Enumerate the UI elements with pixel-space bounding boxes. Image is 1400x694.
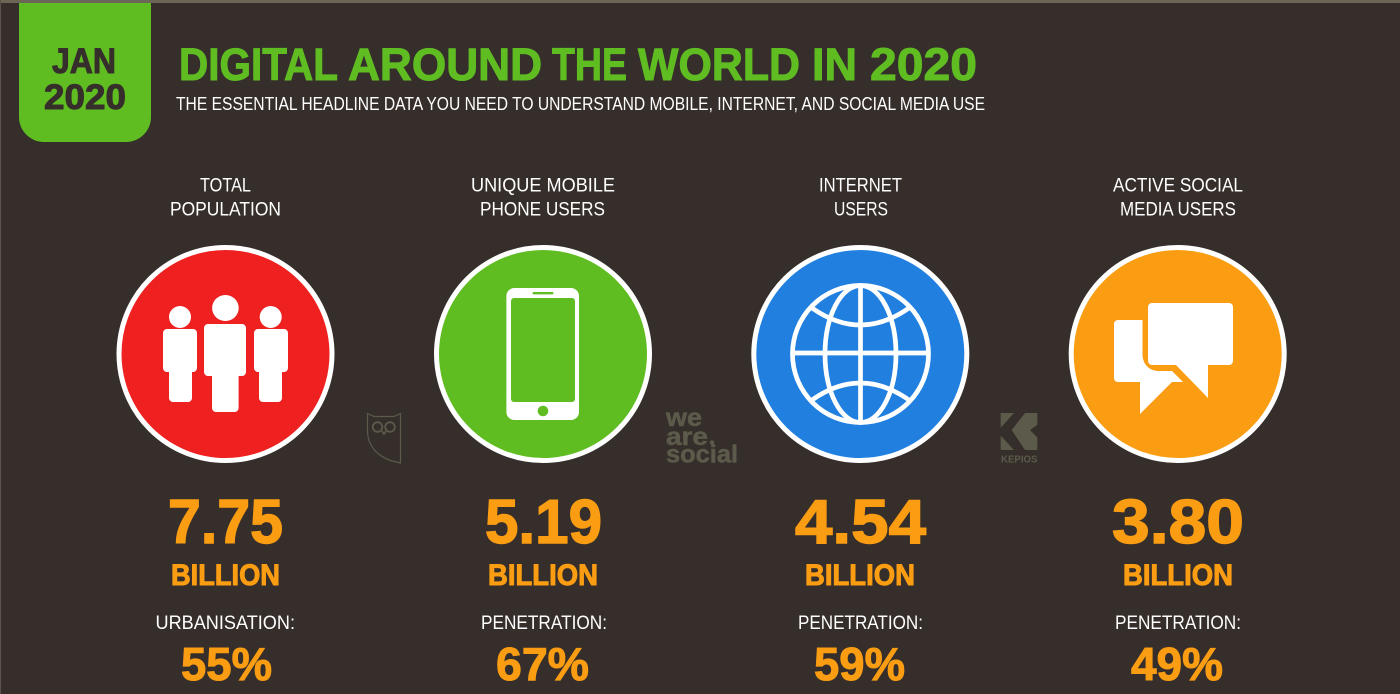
heading: active social media users <box>1113 174 1243 220</box>
panel: internet users <box>754 174 967 690</box>
title: DIGITAL <box>179 39 338 90</box>
logo: we are social: we <box>665 404 702 432</box>
stat: penetration 49%: 49% <box>1131 638 1223 690</box>
stat: penetration 59%: PENETRATION: <box>798 612 923 634</box>
value: 7.75 billion: BILLION <box>171 559 280 592</box>
stat: urbanisation 55%: URBANISATION: <box>156 612 295 634</box>
subtitle: THE ESSENTIAL HEADLINE DATA YOU NEED TO UNDERSTAND MOBILE, INTERNET, AND SOCIAL MEDIA USE <box>176 94 985 114</box>
value: 3.80 billion: BILLION <box>1123 559 1233 592</box>
date tab: 2020 <box>44 78 126 117</box>
icon: chat bubbles in orange circle <box>1071 248 1284 460</box>
stat: penetration 67%: 67% <box>496 638 589 690</box>
date tab: JAN <box>52 42 116 81</box>
value: 4.54 billion: 4.54 <box>795 488 927 557</box>
title <box>179 39 977 90</box>
value: 5.19 billion: 5.19 <box>485 488 602 557</box>
stat: penetration 49%: PENETRATION: <box>1115 612 1241 634</box>
date tab <box>19 3 151 142</box>
value: 7.75 billion: 7.75 <box>168 488 283 557</box>
icon: people in red circle <box>119 248 332 460</box>
value: 3.80 billion: 3.80 <box>1112 488 1244 557</box>
stat: penetration 67%: PENETRATION: <box>481 612 607 634</box>
heading: unique mobile phone users: UNIQUE MOBILE <box>471 174 615 196</box>
value: 5.19 billion: BILLION <box>488 559 598 592</box>
value: 3.80 billion <box>1112 488 1244 592</box>
title: WORLD <box>638 39 800 90</box>
heading: active social media users: MEDIA USERS <box>1120 198 1236 220</box>
logo: we are social: are <box>666 423 708 451</box>
heading: unique mobile phone users <box>471 174 615 220</box>
panel: total population <box>119 174 332 690</box>
icon: phone in green circle <box>436 248 650 460</box>
stat: urbanisation 55%: 55% <box>181 638 272 690</box>
heading: internet users: USERS <box>834 198 888 220</box>
logo: we are social <box>665 404 738 468</box>
logo: we are social: social <box>666 440 738 468</box>
panel: active social media users <box>1071 174 1284 690</box>
value: 7.75 billion <box>168 488 283 592</box>
heading: total population <box>170 174 281 220</box>
title: IN <box>812 39 857 90</box>
stat: urbanisation 55% <box>156 612 295 690</box>
title: THE <box>552 39 627 90</box>
logo: kepios <box>1001 413 1038 466</box>
logo: kepios: KEPIOS <box>1001 454 1038 466</box>
stat: penetration 49% <box>1115 612 1241 690</box>
icon: globe in blue circle <box>754 248 967 460</box>
heading: total population: TOTAL <box>200 174 251 196</box>
heading: unique mobile phone users: PHONE USERS <box>480 198 605 220</box>
stat: penetration 59%: 59% <box>814 638 905 690</box>
stat: penetration 59% <box>798 612 923 690</box>
value: 4.54 billion: BILLION <box>805 559 915 592</box>
heading: active social media users: ACTIVE SOCIAL <box>1113 174 1243 196</box>
panel: unique mobile phone users <box>436 174 650 690</box>
value: 4.54 billion <box>795 488 927 592</box>
value: 5.19 billion <box>485 488 602 592</box>
heading: internet users: INTERNET <box>819 174 902 196</box>
title: 2020 <box>870 39 977 90</box>
logo: owl <box>368 414 400 463</box>
title: AROUND <box>348 39 542 90</box>
stat: penetration 67% <box>481 612 607 690</box>
heading: internet users <box>819 174 902 220</box>
heading: total population: POPULATION <box>170 198 281 220</box>
